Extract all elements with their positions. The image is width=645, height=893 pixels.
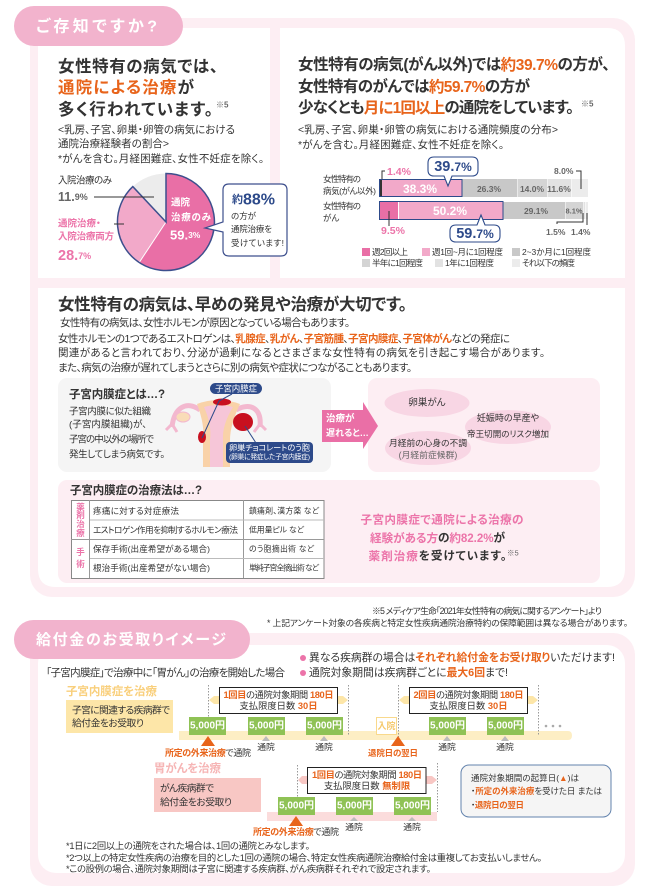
treatment table: 鎮痛剤、漢方薬 など	[249, 506, 320, 516]
panel: visit frequency	[298, 54, 610, 268]
panel: endometriosis treatments: 子宮内膜症の治療法は…?	[70, 483, 202, 497]
footnotes	[66, 840, 542, 874]
source notes: * 上記アンケート対象の各疾病と特定女性疾病通院治療特約の保障範囲は異なる場合があります。	[267, 617, 628, 628]
note box	[154, 778, 261, 812]
callout: about 88%	[205, 184, 287, 256]
info box: start date: ・退院日の翌日	[471, 800, 524, 810]
panel: did you know section	[30, 18, 635, 597]
value callouts: 1.5%	[546, 227, 566, 237]
legend: 週2回以上	[372, 247, 408, 257]
key points	[300, 650, 615, 679]
note box: 給付金をお受取り	[72, 716, 144, 730]
treatment table: エストロゲン作用を抑制するホルモン療法	[93, 524, 238, 535]
treatment table: 疼痛に対する対症療法	[93, 505, 179, 516]
arrow: if treatment is delayed	[322, 402, 378, 449]
panel: what is endometriosis	[58, 378, 331, 472]
panel: what is endometriosis: 発生してしまう病気です。	[69, 448, 165, 460]
treatment table: 療	[76, 528, 85, 538]
benefit amounts: 5,000円	[249, 720, 284, 732]
callout: 39.7%: 39.7%	[434, 159, 472, 175]
heading: 女性特有の病気は、早めの発見や治療が大切です。	[58, 294, 407, 314]
arrow: if treatment is delayed: 遅れると…	[326, 428, 369, 438]
body text: また、病気の治療が遅れてしまうとさらに別の病気や症状につながることもあります。	[58, 361, 412, 374]
info box: start date: ・所定の外来治療を受けた日 または	[471, 786, 602, 796]
label: ovarian chocolate cyst: 卵巣チョコレートのう胞	[229, 442, 310, 452]
statement: 82.2%: 経験がある方の約82.2%が	[370, 530, 505, 544]
note box: 子宮に関連する疾病群で	[72, 704, 171, 716]
heading: 通院による治療が	[58, 77, 195, 97]
panel: consequences of delay	[322, 378, 600, 472]
visit markers: 通院	[315, 742, 333, 752]
visit markers	[165, 736, 514, 758]
treatment table: 根治手術(出産希望がない場合)	[93, 562, 210, 573]
footnotes: *1日に2回以上の通院をされた場合は、1回の通院とみなします。	[66, 840, 310, 851]
stacked bar chart	[323, 157, 591, 268]
pie label: both: 28.7%	[58, 248, 91, 264]
pie label: inpatient only: 11.9%	[58, 190, 88, 204]
label: ovarian chocolate cyst: (卵巣に発症した子宮内膜症)	[229, 452, 310, 461]
survey description	[298, 123, 558, 151]
key points: 異なる疾病群の場合はそれぞれ給付金をお受け取りいただけます!	[309, 650, 615, 664]
panel: outpatient treatment share	[58, 57, 287, 270]
visit markers: 通院	[257, 742, 275, 752]
label: ovarian chocolate cyst	[226, 442, 313, 463]
callout: about 88%: 受けています!	[231, 238, 284, 248]
survey description: 通院治療経験者の割合>	[58, 137, 169, 150]
statement: 82.2%: 子宮内膜症で通院による治療の	[360, 512, 524, 526]
treatment table: 保存手術(出産希望がある場合)	[93, 543, 210, 554]
row labels	[323, 174, 376, 223]
section title pill: benefit: 給付金のお受取りイメージ	[36, 630, 226, 648]
key points: 通院対象期間は疾病群ごとに最大6回まで!	[309, 665, 508, 679]
benefit amounts: 5,000円	[488, 720, 523, 732]
section title pill: did you know	[14, 6, 183, 46]
body text: 女性ホルモンの1つであるエストロゲンは、乳腺症、乳がん、子宮筋腫、子宮内膜症、子宮体がんなどの発症に	[58, 332, 510, 345]
oval: pregnancy risk	[465, 410, 551, 444]
period box 1: 1回目の通院対象期間 180日	[224, 689, 334, 700]
treatment table: 低用量ピル など	[249, 524, 305, 534]
treatment table: 治	[76, 519, 85, 529]
label: endometriosis: 子宮内膜症	[215, 384, 257, 394]
section title pill: did you know: ご存知ですか?	[36, 16, 157, 36]
note box	[66, 700, 173, 733]
pie chart: 59.3%	[170, 228, 201, 242]
statement: 82.2%	[360, 512, 524, 562]
heading: ※5	[216, 100, 229, 110]
panel: what is endometriosis: (子宮内膜組織)が、	[69, 418, 147, 430]
period box: 支払限度日数 無制限	[324, 780, 411, 791]
value callouts: 1.4%	[387, 166, 412, 178]
treatment table	[71, 500, 324, 578]
panel: what is endometriosis: 子宮内膜症とは…?	[69, 387, 165, 401]
bar: diseases other than cancer: 14.0%	[520, 184, 544, 194]
legend: 週1回~月に1回程度	[432, 247, 503, 257]
legend: 半年に1回程度	[372, 258, 423, 268]
source notes	[267, 605, 628, 628]
period box: 1回目の通院対象期間 180日	[312, 769, 422, 780]
heading	[58, 57, 229, 119]
period box 2	[410, 688, 528, 714]
callout: about 88%: の方が	[231, 211, 257, 221]
callout: 59.7%	[450, 215, 500, 242]
note box: がん疾病群で	[160, 782, 215, 794]
pie chart: 治療のみ	[171, 212, 212, 224]
bar: diseases other than cancer	[379, 179, 588, 197]
treatment table: のう胞摘出術 など	[249, 544, 315, 554]
treatment table: 薬	[76, 502, 85, 512]
value callouts: 8.0%	[554, 166, 574, 176]
info box: start date: 通院対象期間の起算日(▲)は	[471, 773, 579, 783]
legend: それ以下の頻度	[522, 258, 575, 268]
survey description: *がんを含む。月経困難症、女性不妊症を除く。	[298, 138, 504, 151]
bar: cancer	[379, 202, 588, 220]
treatment table: 単純子宮全摘出術 など	[249, 562, 320, 572]
benefit amounts: 5,000円	[430, 720, 465, 732]
pie label: both	[58, 218, 114, 264]
timeline: stomach cancer: 胃がんを治療	[154, 761, 222, 775]
legend: 1年に1回程度	[445, 258, 494, 268]
bar: diseases other than cancer: 38.3%	[403, 182, 437, 196]
oval: pregnancy risk: 帝王切開のリスク増加	[467, 429, 549, 439]
oval: premenstrual: 月経前の心身の不調	[389, 437, 467, 448]
benefit amounts: 5,000円	[279, 800, 314, 812]
section title pill: benefit	[14, 620, 250, 659]
oval: premenstrual	[385, 431, 471, 465]
treatment table: 手	[76, 547, 85, 557]
bar: cancer: 8.1%	[565, 206, 583, 216]
callout: 39.7%	[428, 157, 478, 186]
legend	[362, 247, 591, 268]
pie label: inpatient only	[58, 174, 112, 204]
info box: start date	[461, 765, 611, 817]
pie label: inpatient only: 入院治療のみ	[58, 174, 112, 186]
oval: ovarian cancer	[384, 389, 470, 417]
callout: about 88%: 通院治療を	[231, 224, 272, 234]
arrow: if treatment is delayed: 治療が	[326, 412, 355, 424]
survey description: <乳房、子宮、卵巣・卵管の病気における	[58, 123, 235, 136]
benefit amounts: 5,000円	[395, 800, 430, 812]
statement: 82.2%: ※5	[507, 548, 519, 558]
survey description: <乳房、子宮、卵巣・卵管の病気における通院頻度の分布>	[298, 123, 558, 136]
survey description	[58, 123, 264, 165]
hospitalization box	[376, 718, 396, 734]
footnotes: *この設例の場合、通院対象期間は子宮に関連する疾病群、がん疾病群それぞれで設定されます。	[66, 863, 431, 874]
body text: 関連があると言われており、分泌が過剰になるとさまざまな女性特有の病気を引き起こす場合があります。	[58, 346, 545, 359]
oval: pregnancy risk: 妊娠時の早産や	[477, 412, 539, 423]
timeline: stomach cancer	[154, 761, 438, 837]
panel: what is endometriosis: 子宮の中以外の場所で	[69, 434, 154, 446]
benefit amounts: 5,000円	[190, 720, 225, 732]
continuation dots	[545, 725, 561, 727]
bar: cancer: 29.1%	[524, 206, 548, 216]
panel: what is endometriosis: 子宮内膜に似た組織	[69, 406, 151, 418]
footnotes: *2つ以上の特定女性疾病の治療を目的とした1回の通院の場合、特定女性疾病通院治療給付金は重複してお支払いしません。	[66, 852, 542, 863]
pie chart: 通院	[171, 196, 191, 208]
heading: 女性特有の病気(がん以外)では約39.7%の方が、	[298, 54, 610, 74]
body text	[58, 316, 545, 374]
timeline: endometriosis: 子宮内膜症を治療	[66, 684, 158, 698]
value callouts: 9.5%	[381, 225, 406, 237]
callout: about 88%: 約88%	[232, 192, 275, 208]
heading: 女性特有のがんでは約59.7%の方が	[298, 76, 531, 96]
visit markers: 通院	[345, 822, 363, 832]
row labels: 女性特有の	[323, 201, 361, 211]
arrow markers	[209, 696, 538, 704]
benefit amounts	[189, 717, 524, 735]
period box 1	[220, 688, 338, 714]
heading: 女性特有の病気では、	[58, 57, 218, 76]
hospitalization box: 入院	[377, 721, 396, 731]
panel: endometriosis treatments	[58, 480, 600, 583]
heading: 多く行われています。	[58, 99, 213, 119]
treatment table: 術	[76, 559, 85, 569]
period box 2: 2回目の通院対象期間 180日	[414, 689, 524, 700]
bar: cancer: 50.2%	[433, 204, 467, 218]
scenario description: 「子宮内膜症」で治療中に「胃がん」の治療を開始した場合	[46, 666, 286, 679]
body text: 女性特有の病気は、女性ホルモンが原因となっている場合もあります。	[60, 316, 350, 329]
panel: early detection	[58, 294, 600, 583]
visit markers: 所定の外来治療で通院	[165, 747, 251, 758]
heading: 少なくとも月に1回以上の通院をしています。	[298, 98, 574, 116]
source notes: ※5 メディケア生命「2021年女性特有の病気に関するアンケート」より	[372, 605, 602, 616]
pie label: both: 通院治療・	[58, 218, 101, 230]
visit markers: 所定の外来治療で通院	[253, 826, 339, 837]
oval: ovarian cancer: 卵巣がん	[408, 396, 446, 408]
statement: 82.2%: 薬剤治療を受けています。	[368, 548, 506, 562]
benefit amounts: 5,000円	[337, 800, 372, 812]
treatment table: 剤	[76, 510, 85, 520]
callout: 59.7%: 59.7%	[456, 226, 494, 242]
note box: 給付金をお受取り	[160, 796, 232, 808]
illustration: uterus	[166, 394, 266, 467]
period box	[308, 768, 426, 794]
period box 1: 支払限度日数 30日	[239, 700, 318, 711]
visit markers: 通院	[438, 742, 456, 752]
heading: ※5	[581, 100, 594, 108]
period box 2: 支払限度日数 30日	[429, 700, 508, 711]
bar: diseases other than cancer: 11.6%	[547, 184, 571, 194]
timeline: endometriosis	[66, 684, 572, 758]
panel: benefit payment image	[30, 633, 635, 886]
oval: premenstrual: (月経前症候群)	[399, 449, 457, 460]
row labels: がん	[323, 213, 340, 223]
visit markers: 通院	[496, 742, 514, 752]
survey description: *がんを含む。月経困難症、女性不妊症を除く。	[58, 152, 264, 165]
value callouts	[381, 166, 591, 237]
legend: 2~3か月に1回程度	[522, 247, 591, 257]
pie chart	[94, 173, 214, 270]
heading	[298, 54, 610, 116]
row labels: 病気(がん以外)	[323, 186, 376, 196]
bar: diseases other than cancer: 26.3%	[477, 184, 501, 194]
visit markers	[253, 816, 421, 837]
benefit amounts: 5,000円	[307, 720, 342, 732]
visit markers: 退院日の翌日	[368, 748, 418, 758]
row labels: 女性特有の	[323, 174, 361, 184]
pie label: both: 入院治療両方	[58, 230, 114, 242]
value callouts: 1.4%	[571, 227, 591, 237]
visit markers: 通院	[403, 822, 421, 832]
benefit amounts	[278, 797, 431, 815]
